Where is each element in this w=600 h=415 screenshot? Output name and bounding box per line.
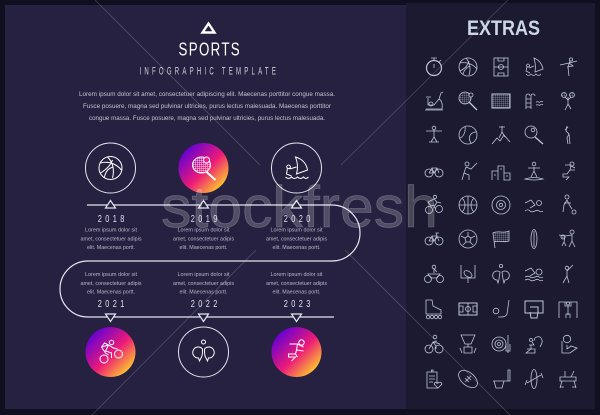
descriptions top: Lorem ipsum dolor sit: [270, 228, 323, 234]
icon: basket hoop: [525, 301, 543, 318]
icon: title triangle: [202, 24, 214, 32]
icon: swimming pool: [526, 94, 543, 109]
descriptions top: amet, consectetuer adipis: [80, 236, 142, 242]
icon: pommel horse: [560, 371, 576, 388]
icon: roller skate: [426, 300, 442, 319]
descriptions top: amet, consectetuer adipis: [266, 236, 327, 242]
descriptions bottom: Lorem ipsum dolor sit: [178, 272, 230, 278]
icon: windsurf: [526, 58, 543, 76]
icon: kayak: [525, 370, 543, 388]
descriptions bottom: elit. Maecenas portt.: [180, 290, 228, 296]
title: SPORTS: [178, 39, 240, 60]
year labels bottom: 2022: [191, 298, 217, 309]
icon: american football: [455, 367, 481, 391]
icon: dancer: [565, 126, 570, 144]
descriptions bottom: amet, consectetuer adipis: [173, 281, 234, 287]
extras icon grid: [424, 58, 577, 391]
timeline path: [60, 205, 360, 317]
icon: ping pong: [493, 264, 509, 283]
descriptions bottom: [80, 272, 327, 296]
icon: golf club: [493, 300, 509, 317]
icon: soccer player: [563, 195, 576, 214]
descriptions top: elit. Maecenas portt.: [87, 245, 135, 251]
intro paragraph: Fusce posuere, magna sed pulvinar ultricies, purus lectus malesuada. Maecenas porttitor: [83, 103, 332, 110]
intro paragraph: congue massa. Fusce posuere, magna sed pulvinar ultricies, purus lectus malesuada.: [89, 115, 325, 122]
icon: skateboard jump: [426, 126, 442, 142]
icon: cheerleader: [562, 92, 574, 110]
icon: skater: [563, 162, 575, 180]
subtitle: INFOGRAPHIC TEMPLATE: [140, 65, 276, 77]
icon: motorbike: [424, 265, 444, 282]
icon: baseball: [459, 126, 477, 144]
icon: basketball hoop: [493, 370, 510, 388]
year labels bottom: 2023: [284, 298, 310, 309]
icon: road cyclist: [425, 335, 443, 353]
icon: trophy: [460, 335, 476, 353]
icon: kitesurf: [526, 337, 542, 353]
year labels top: 2020: [284, 213, 310, 224]
descriptions top: amet, consectetuer adipis: [173, 236, 234, 242]
icon: surfboard: [531, 230, 537, 248]
icon: bicycle: [425, 168, 443, 177]
icon: basketball: [459, 196, 477, 214]
icon: mountain climbing: [492, 126, 510, 144]
icon: stopwatch: [426, 58, 442, 76]
icon: football pitch: [494, 58, 508, 76]
descriptions bottom: amet, consectetuer adipis: [80, 281, 142, 287]
icon: ballet: [560, 58, 577, 76]
icon: city bike: [425, 233, 443, 245]
descriptions top: Lorem ipsum dolor sit: [178, 228, 230, 234]
watermark: stockfresh: [161, 175, 438, 240]
panel: main: [5, 5, 406, 409]
timeline markers: [106, 200, 302, 322]
icon: rugby goal: [461, 265, 475, 283]
year labels top: 2019: [191, 213, 217, 224]
icon: goal net: [492, 94, 510, 108]
icon: swimmer: [525, 200, 543, 212]
year labels bottom: [98, 298, 310, 309]
icon: football field: [459, 303, 477, 315]
icon: pull-up bar: [559, 302, 577, 318]
descriptions bottom: amet, consectetuer adipis: [266, 281, 327, 287]
intro paragraph: Lorem ipsum dolor sit amet, consectetuer adipiscing elit. Maecenas porttitor congue massa.: [79, 91, 335, 98]
year labels bottom: 2021: [98, 298, 124, 309]
descriptions top: elit. Maecenas portt.: [180, 245, 228, 251]
descriptions bottom: Lorem ipsum dolor sit: [270, 272, 323, 278]
icon: billiard ball: [492, 196, 510, 214]
icon: tennis racket 3: [525, 126, 543, 144]
year labels top: 2018: [98, 213, 124, 224]
heading: extras: EXTRAS: [467, 17, 540, 40]
icon: podium: [492, 166, 510, 180]
descriptions top: Lorem ipsum dolor sit: [85, 228, 138, 234]
milestone 2020: windsurfing: [272, 143, 322, 193]
milestone 2019: tennis racket: [178, 143, 228, 193]
milestone 2023: running: [272, 327, 322, 377]
icon: fencer: [462, 162, 477, 180]
icon: volleyball: [459, 58, 477, 76]
milestone 2021: cycling: [86, 327, 136, 377]
icon: archery target: [492, 335, 510, 353]
year labels top: [98, 213, 310, 224]
icon: golfer: [563, 265, 573, 283]
icon: soccer ball: [459, 230, 477, 248]
icon: surfer: [525, 162, 543, 180]
milestone 2018: volleyball: [86, 143, 136, 193]
descriptions bottom: Lorem ipsum dolor sit: [85, 272, 138, 278]
panel: extras: [406, 3, 595, 409]
descriptions top: elit. Maecenas portt.: [272, 245, 320, 251]
icon: exercise bike: [425, 92, 443, 110]
background diagonal lines: [92, 0, 510, 415]
icon: tennis racket 2: [459, 92, 477, 110]
milestone 2022: table tennis: [178, 327, 228, 377]
icon: martial arts: [559, 230, 575, 247]
descriptions bottom: elit. Maecenas portt.: [272, 290, 320, 296]
descriptions bottom: elit. Maecenas portt.: [87, 290, 135, 296]
icon: checkered flag: [493, 231, 509, 248]
icon: medical clipboard: [427, 370, 442, 388]
descriptions top: [80, 228, 327, 251]
intro paragraph: [79, 91, 335, 122]
icon: mountain bike: [426, 195, 442, 214]
icon: swimmer 2: [525, 268, 543, 281]
icon: arm muscle: [562, 335, 577, 353]
